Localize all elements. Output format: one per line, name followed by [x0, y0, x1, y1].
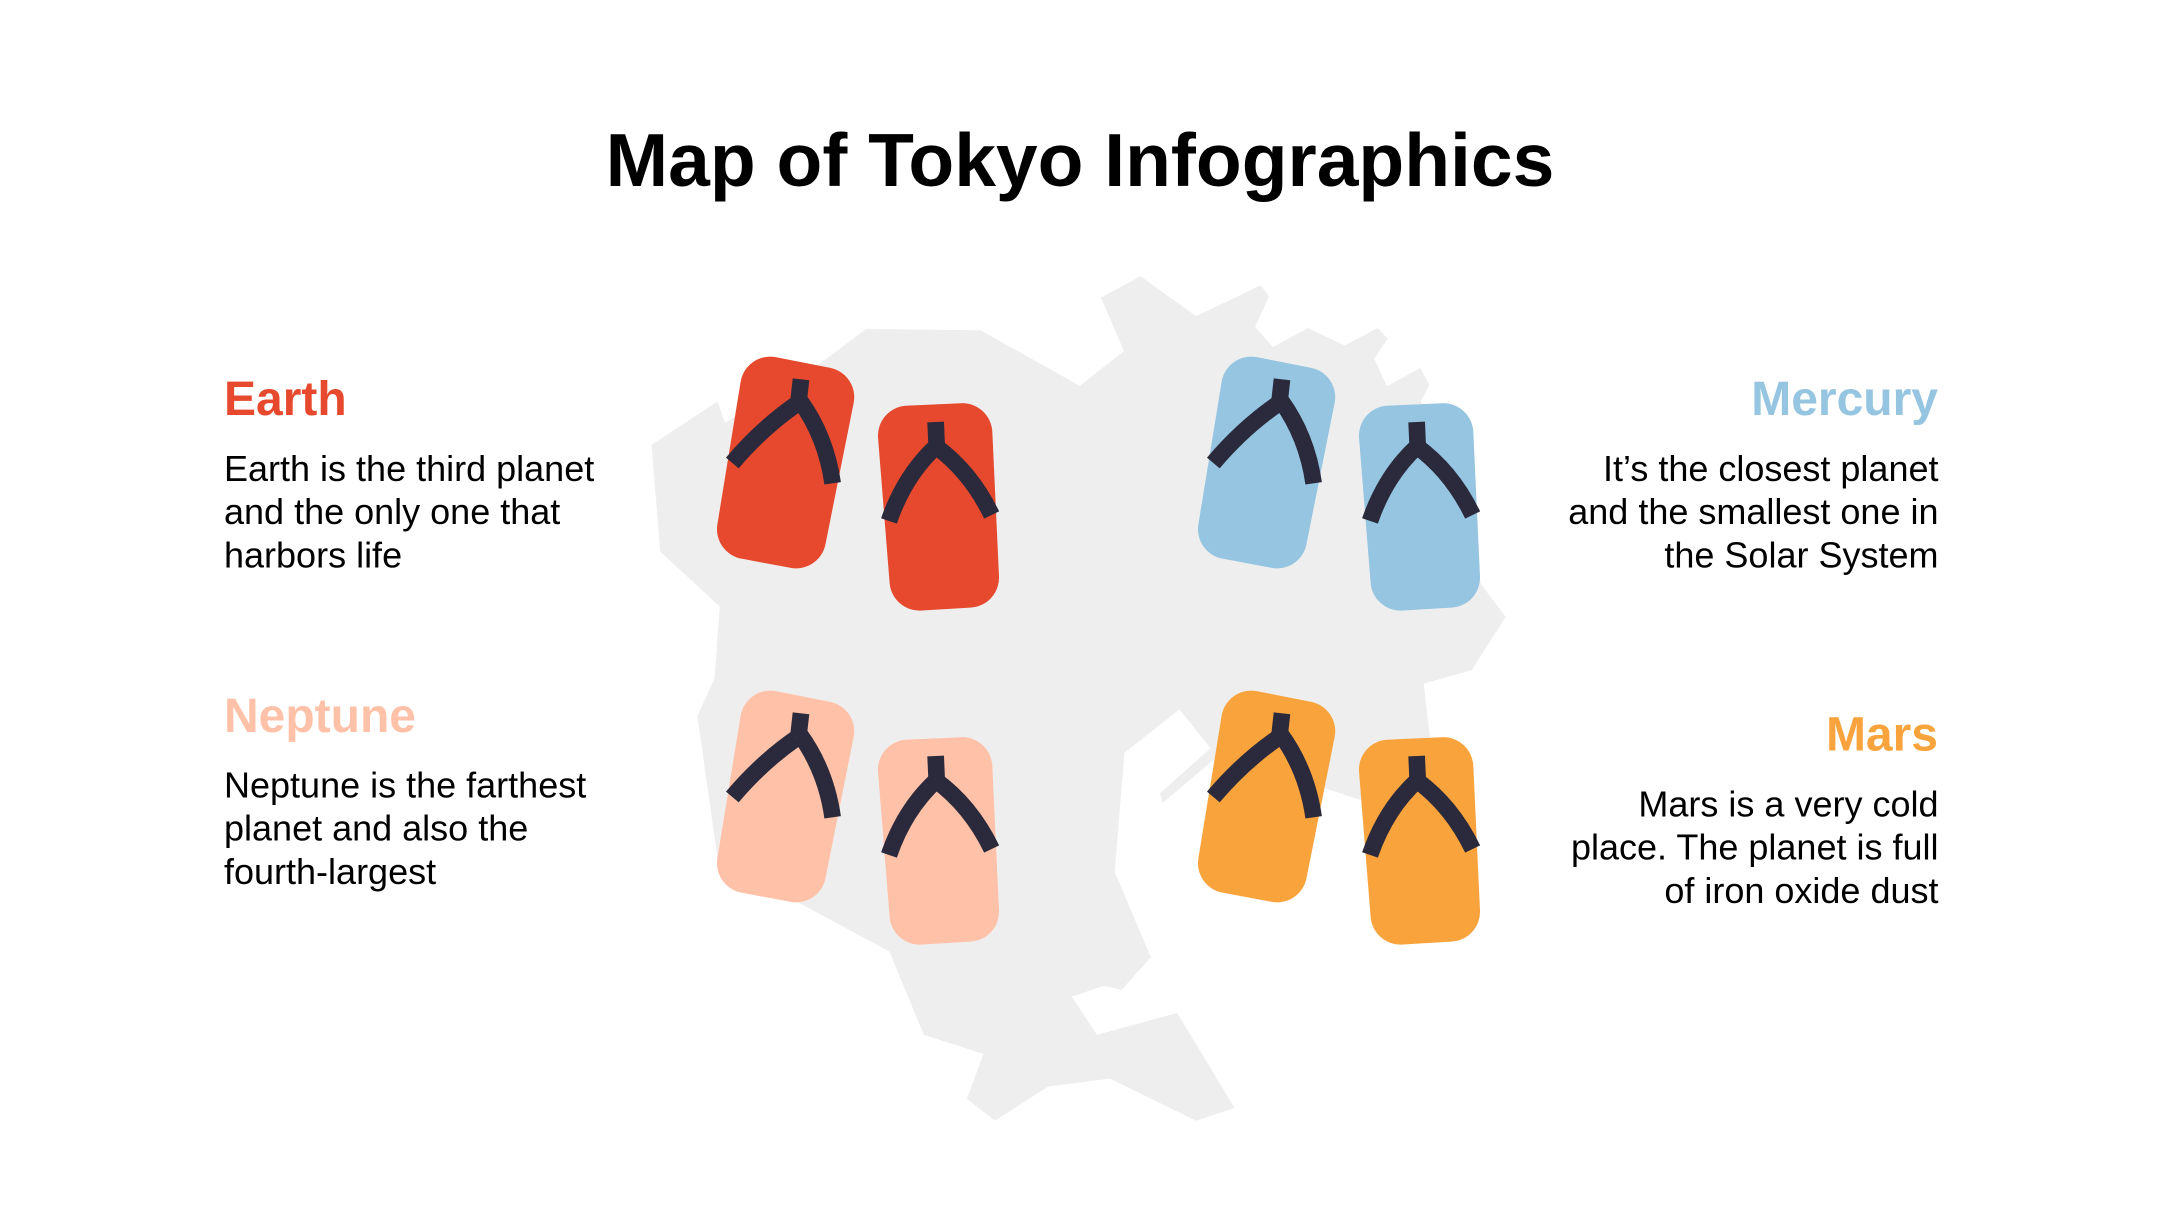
text: Neptune description: Neptune is the farthest: [224, 764, 586, 806]
panel: Mars text: [1571, 709, 1938, 911]
text: Mars description: of iron oxide dust: [1664, 870, 1938, 911]
heading: Mercury: Mercury: [1751, 373, 1938, 426]
text: Mars description: Mars is a very cold: [1638, 784, 1938, 824]
text: Neptune description: planet and also the: [224, 808, 528, 848]
text: Mercury description: It’s the closest planet: [1603, 448, 1938, 489]
heading: Earth: Earth: [224, 373, 347, 426]
map of Tokyo: [652, 276, 1506, 1121]
icon: blue sandals (Mercury): [1198, 357, 1480, 611]
heading: Mars: Mars: [1826, 709, 1938, 762]
title: Map of Tokyo Infographics: [606, 118, 1554, 202]
icon: pink sandals (Neptune): [717, 691, 999, 945]
panel: Neptune text: [224, 690, 586, 892]
icon: red sandals (Earth): [717, 357, 999, 611]
text: Mercury description: the Solar System: [1664, 534, 1938, 576]
text: Earth description: and the only one that: [224, 491, 560, 532]
text: Mercury description: and the smallest one in: [1568, 491, 1938, 532]
icon: orange sandals (Mars): [1198, 691, 1480, 945]
heading: Neptune: Neptune: [224, 690, 416, 743]
text: Mars description: place. The planet is full: [1571, 826, 1938, 868]
text: Earth description: Earth is the third planet: [224, 448, 594, 489]
text: Neptune description: fourth-largest: [224, 851, 436, 892]
panel: Mercury text: [1568, 373, 1938, 576]
panel: Earth text: [224, 373, 594, 576]
text: Earth description: harbors life: [224, 534, 402, 576]
